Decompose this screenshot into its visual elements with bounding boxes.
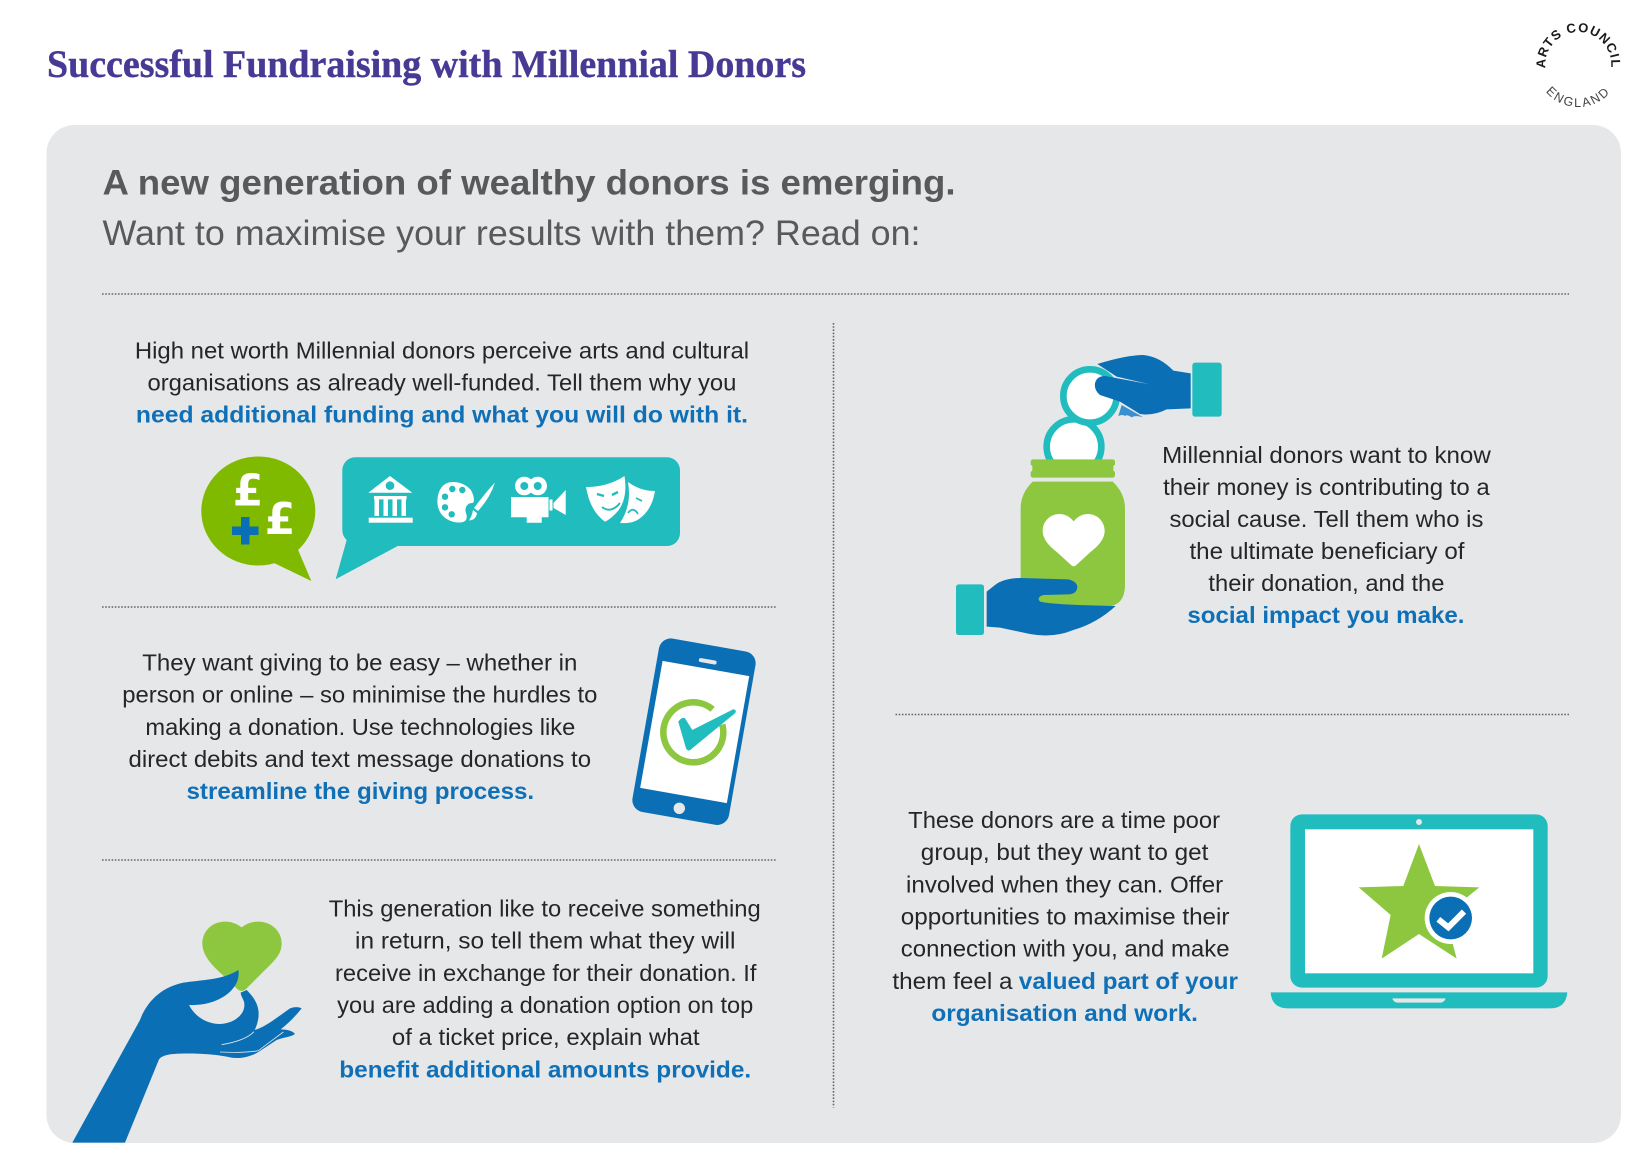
heading: A new generation of wealthy donors is emerging. (102, 162, 955, 202)
text block: easy giving: streamline the giving process. (186, 778, 534, 804)
text block: additional funding: High net worth Millennial donors perceive arts and cultural (135, 338, 749, 364)
icon: palette and brush (437, 482, 495, 523)
text block: easy giving (122, 650, 597, 804)
icon: theatre masks (586, 476, 655, 523)
text block: easy giving: person or online – so minimise the hurdles to (122, 682, 597, 708)
text block: easy giving: They want giving to be easy – whether in (142, 650, 577, 676)
text block: social cause: their money is contributing to a (1163, 474, 1490, 500)
logo: Arts Council England: ARTS COUNCIL (1536, 23, 1620, 68)
text block: something in return: benefit additional amounts provide. (339, 1056, 751, 1082)
text block: additional funding: need additional funding and what you will do with it. (136, 401, 748, 427)
text block: valued part: involved when they can. Offer (906, 871, 1223, 897)
text block: valued part: organisation and work. (931, 1000, 1198, 1026)
green speech bubble: £ (233, 466, 263, 517)
text block: social cause: social cause. Tell them who is (1169, 506, 1483, 532)
text block: valued part: opportunities to maximise their (901, 904, 1230, 930)
green speech bubble: £ (265, 494, 295, 545)
icon: film camera (511, 477, 566, 523)
text block: something in return: you are adding a donation option on top (337, 992, 753, 1018)
text block: something in return: of a ticket price, explain what (392, 1024, 700, 1050)
logo: Arts Council England (1536, 23, 1620, 107)
teal speech bubble (336, 457, 680, 579)
text block: valued part: them feel a (892, 968, 1012, 994)
text block: valued part (892, 807, 1238, 1026)
heading: Want to maximise your results with them? Read on: (102, 213, 920, 253)
icon: hand holding heart (72, 922, 302, 1143)
heading (102, 162, 955, 253)
text block: social cause: Millennial donors want to know (1162, 442, 1491, 468)
icon: mobile phone with tick (630, 637, 758, 827)
icon: speech bubbles with pound signs (201, 456, 680, 581)
icon: laptop with star (1271, 814, 1567, 1008)
text block: valued part: These donors are a time poor (908, 807, 1220, 833)
text block: social cause: the ultimate beneficiary of (1189, 538, 1465, 564)
text block: social cause (1162, 442, 1491, 628)
icon: coins, jar and hands (956, 355, 1222, 635)
title: Successful Fundraising with Millennial Donors (47, 43, 806, 86)
text block: easy giving: making a donation. Use technologies like (145, 714, 575, 740)
green speech bubble (201, 456, 315, 581)
text block: valued part: valued part of your (1019, 968, 1238, 994)
text block: something in return: receive in exchange for their donation. If (335, 960, 757, 986)
text block: valued part: group, but they want to get (921, 839, 1209, 865)
logo: Arts Council England: ENGLAND (1546, 86, 1608, 107)
text block: easy giving: direct debits and text message donations to (129, 746, 591, 772)
text block: additional funding: organisations as already well-funded. Tell them why you (147, 370, 736, 396)
text block: social cause: their donation, and the (1208, 570, 1444, 596)
text block: additional funding (135, 338, 749, 427)
icon: museum (368, 476, 413, 523)
text block: social cause: social impact you make. (1187, 602, 1464, 628)
text block: valued part: connection with you, and make (901, 936, 1230, 962)
text block: something in return: This generation like to receive something (329, 896, 761, 922)
text block: something in return (329, 896, 761, 1082)
text block: something in return: in return, so tell them what they will (355, 928, 735, 954)
